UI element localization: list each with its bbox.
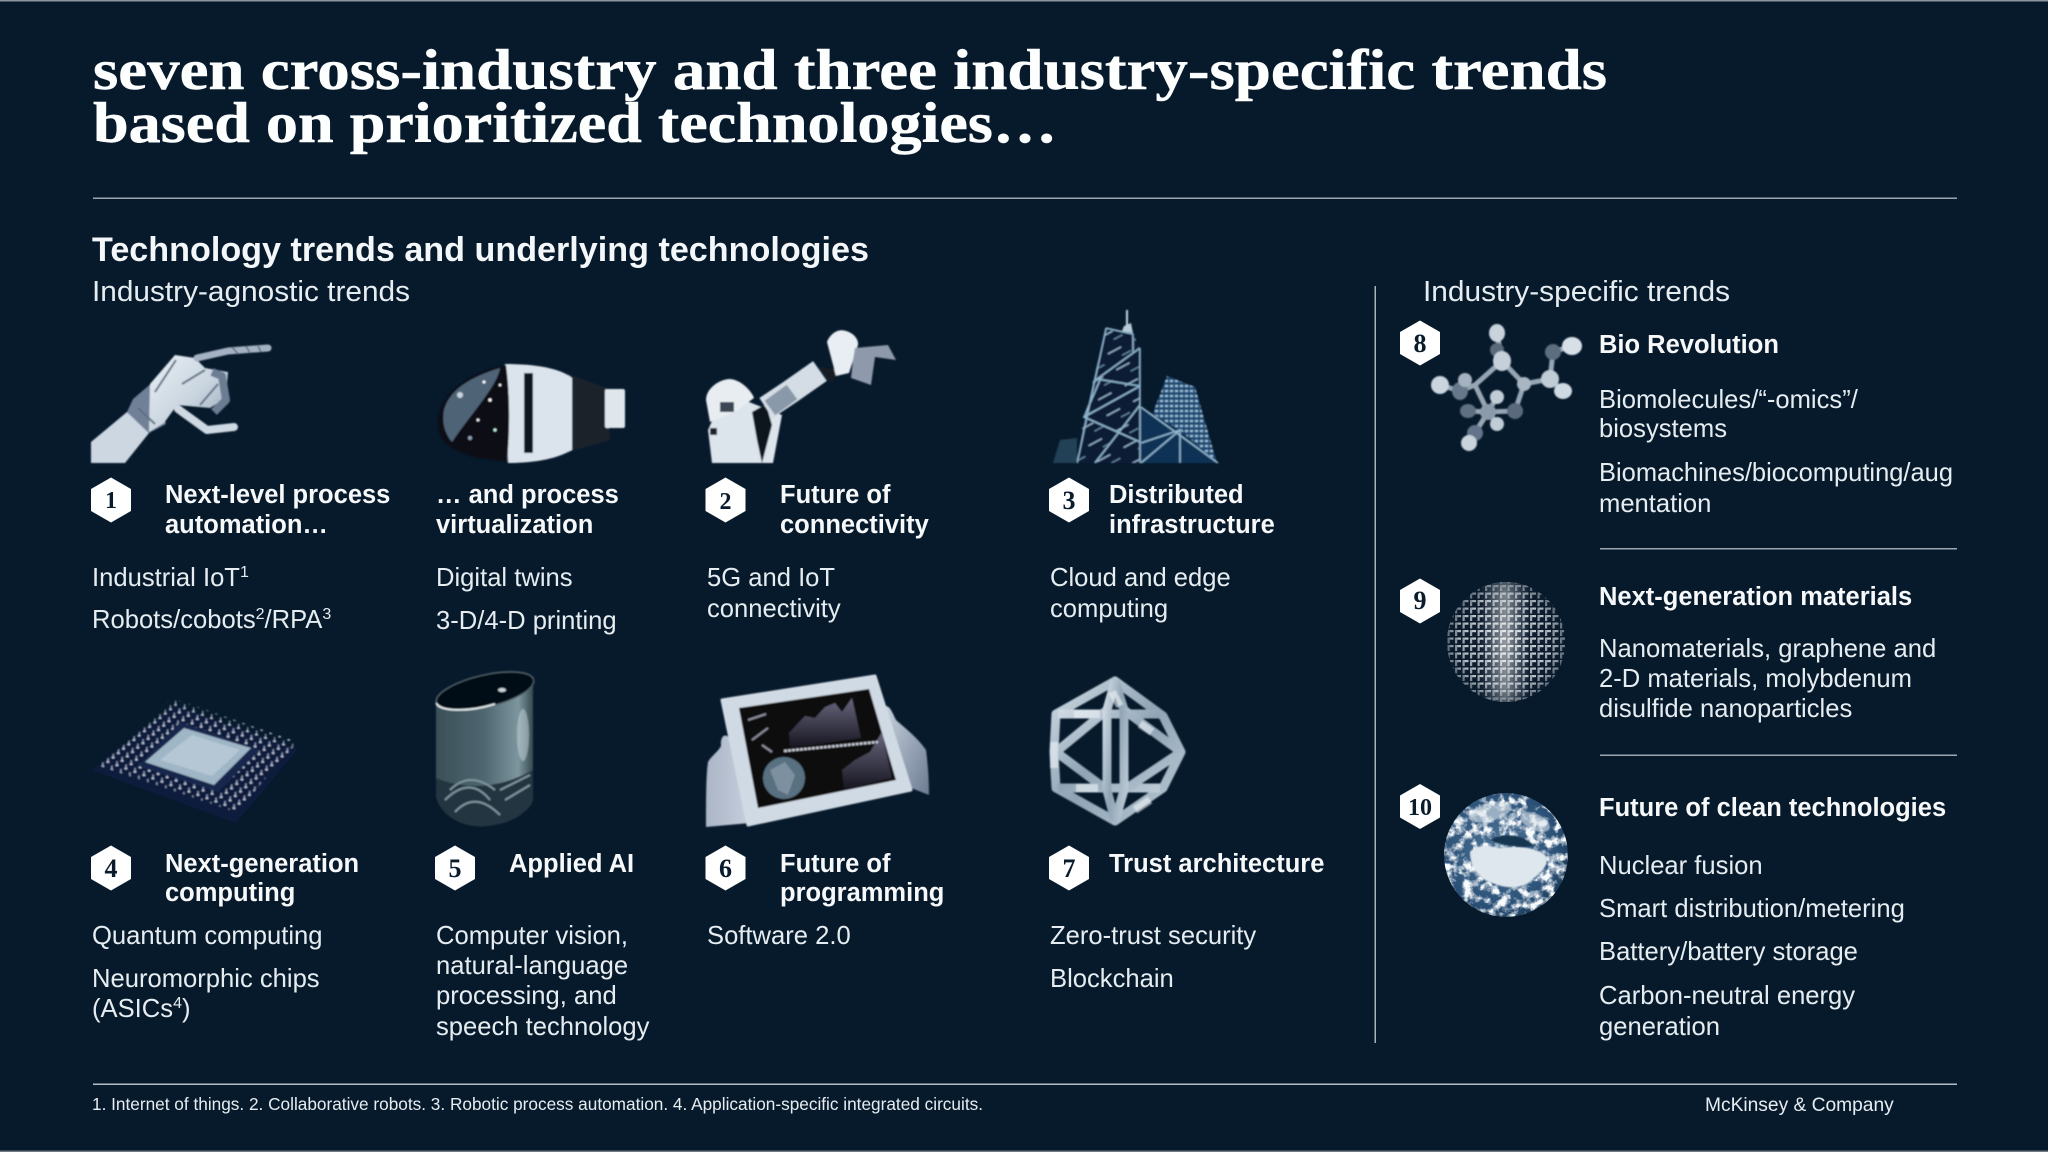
icon: robot arm	[706, 330, 896, 463]
badge 7	[1049, 846, 1089, 890]
badge 2: 2	[720, 489, 732, 515]
technology list: (ASICs	[92, 995, 190, 1023]
badge 10	[1400, 784, 1440, 829]
technology list: 2	[256, 606, 265, 623]
icon: processor chip	[92, 698, 298, 823]
heading: Applied AI	[509, 850, 634, 878]
technology list: Carbon-neutral energy	[1599, 982, 1855, 1010]
badge 1: 1	[105, 488, 117, 514]
badge 4: 4	[104, 854, 118, 883]
panel: trend 10 clean tech	[1400, 784, 1946, 1041]
icon: skyscrapers	[1053, 310, 1218, 463]
heading: computing	[165, 879, 295, 907]
technology list: speech technology	[436, 1013, 650, 1041]
title: seven cross-industry and three industry-specific trends	[93, 39, 1607, 102]
badge 3	[1049, 478, 1089, 522]
heading: automation…	[165, 511, 328, 539]
heading: Next-level process	[165, 481, 390, 509]
technology list: Blockchain	[1050, 965, 1174, 993]
technology list: Robots/cobots	[92, 606, 331, 634]
heading: virtualization	[436, 511, 593, 539]
heading: programming	[780, 879, 944, 907]
technology list: processing, and	[436, 982, 617, 1010]
technology list: Quantum computing	[92, 922, 322, 950]
badge 6: 6	[719, 854, 732, 883]
panel: trend 5 applied AI	[433, 664, 650, 1041]
badge 9	[1400, 578, 1440, 624]
badge 9: 9	[1414, 586, 1426, 615]
title: based on prioritized technologies…	[93, 92, 1057, 155]
heading: Bio Revolution	[1599, 331, 1779, 359]
technology list: Battery/battery storage	[1599, 938, 1858, 966]
technology list: generation	[1599, 1013, 1720, 1041]
heading: Future of	[780, 850, 891, 878]
panel: trend 7 trust	[1049, 681, 1324, 993]
technology list: Industrial IoT	[92, 564, 249, 592]
heading: Next-generation materials	[1599, 583, 1912, 611]
badge 5	[435, 846, 475, 890]
technology list: Nuclear fusion	[1599, 852, 1763, 880]
technology list: Biomolecules/“-omics”/	[1599, 386, 1859, 414]
panel: trend 6 programming	[706, 676, 944, 950]
panel: trend 8 bio revolution	[1400, 320, 1953, 518]
badge 8	[1400, 320, 1440, 366]
heading: Future of clean technologies	[1599, 794, 1946, 822]
heading: Distributed	[1109, 481, 1244, 509]
heading: connectivity	[780, 511, 930, 539]
technology list: Zero-trust security	[1050, 922, 1256, 950]
technology list: 2-D materials, molybdenum	[1599, 665, 1912, 693]
icon: molecule	[1431, 324, 1582, 451]
technology list: Smart distribution/metering	[1599, 895, 1905, 923]
technology list: Nanomaterials, graphene and	[1599, 635, 1936, 663]
technology list: Computer vision,	[436, 922, 628, 950]
heading: Future of	[780, 481, 891, 509]
panel: process virtualization	[436, 364, 625, 635]
technology list: natural-language	[436, 952, 628, 980]
footnotes: 1. Internet of things. 2. Collaborative robots. 3. Robotic process automation. 4. Application-specific integrated circuits.	[92, 1094, 983, 1114]
panel: trend 9 materials	[1400, 578, 1936, 723]
technology list: 1	[240, 564, 249, 581]
icon: silicon wafer	[1446, 581, 1566, 703]
badge 10: 10	[1408, 795, 1432, 821]
heading: infrastructure	[1109, 511, 1275, 539]
technology list: biosystems	[1599, 415, 1727, 443]
technology list: Neuromorphic chips	[92, 965, 320, 993]
icon: earth globe	[1444, 793, 1568, 917]
technology list: 3-D/4-D printing	[436, 607, 617, 635]
technology list: disulfide nanoparticles	[1599, 695, 1852, 723]
icon: smart speaker	[433, 664, 537, 826]
technology list: computing	[1050, 595, 1168, 623]
subheading: industry-specific: Industry-specific trends	[1423, 276, 1730, 308]
badge 1	[91, 478, 131, 522]
technology list: Biomachines/biocomputing/aug	[1599, 459, 1953, 487]
technology list: 4	[173, 995, 182, 1012]
badge 8: 8	[1414, 329, 1426, 358]
technology list: Software 2.0	[707, 922, 851, 950]
heading: … and process	[436, 481, 619, 509]
technology list: 3	[322, 606, 331, 623]
heading: Next-generation	[165, 850, 359, 878]
technology list: Digital twins	[436, 564, 573, 592]
section heading: Technology trends and underlying technologies	[92, 231, 869, 269]
badge 3: 3	[1062, 486, 1076, 515]
badge 7: 7	[1062, 854, 1076, 883]
badge 6	[706, 846, 746, 890]
technology list: Cloud and edge	[1050, 564, 1231, 592]
icon: VR headset	[438, 364, 625, 463]
badge 2	[706, 478, 746, 522]
panel: trend 1 process automation	[91, 346, 390, 634]
technology list: 5G and IoT	[707, 564, 835, 592]
icon: tablet with charts	[706, 676, 929, 827]
source: McKinsey & Company: McKinsey & Company	[1705, 1095, 1894, 1116]
technology list: )	[182, 995, 190, 1023]
panel: trend 4 computing	[91, 698, 359, 1023]
technology list: mentation	[1599, 490, 1711, 518]
panel: trend 3 infrastructure	[1049, 310, 1275, 623]
technology list: connectivity	[707, 595, 841, 623]
technology list: /RPA	[265, 606, 323, 634]
icon: robot hand	[91, 346, 268, 463]
subheading: industry-agnostic: Industry-agnostic trends	[92, 276, 410, 308]
badge 4	[91, 846, 131, 890]
panel: trend 2 connectivity	[706, 330, 930, 623]
badge 5: 5	[448, 854, 462, 883]
icon: wireframe polyhedron	[1054, 681, 1181, 821]
heading: Trust architecture	[1109, 850, 1324, 878]
